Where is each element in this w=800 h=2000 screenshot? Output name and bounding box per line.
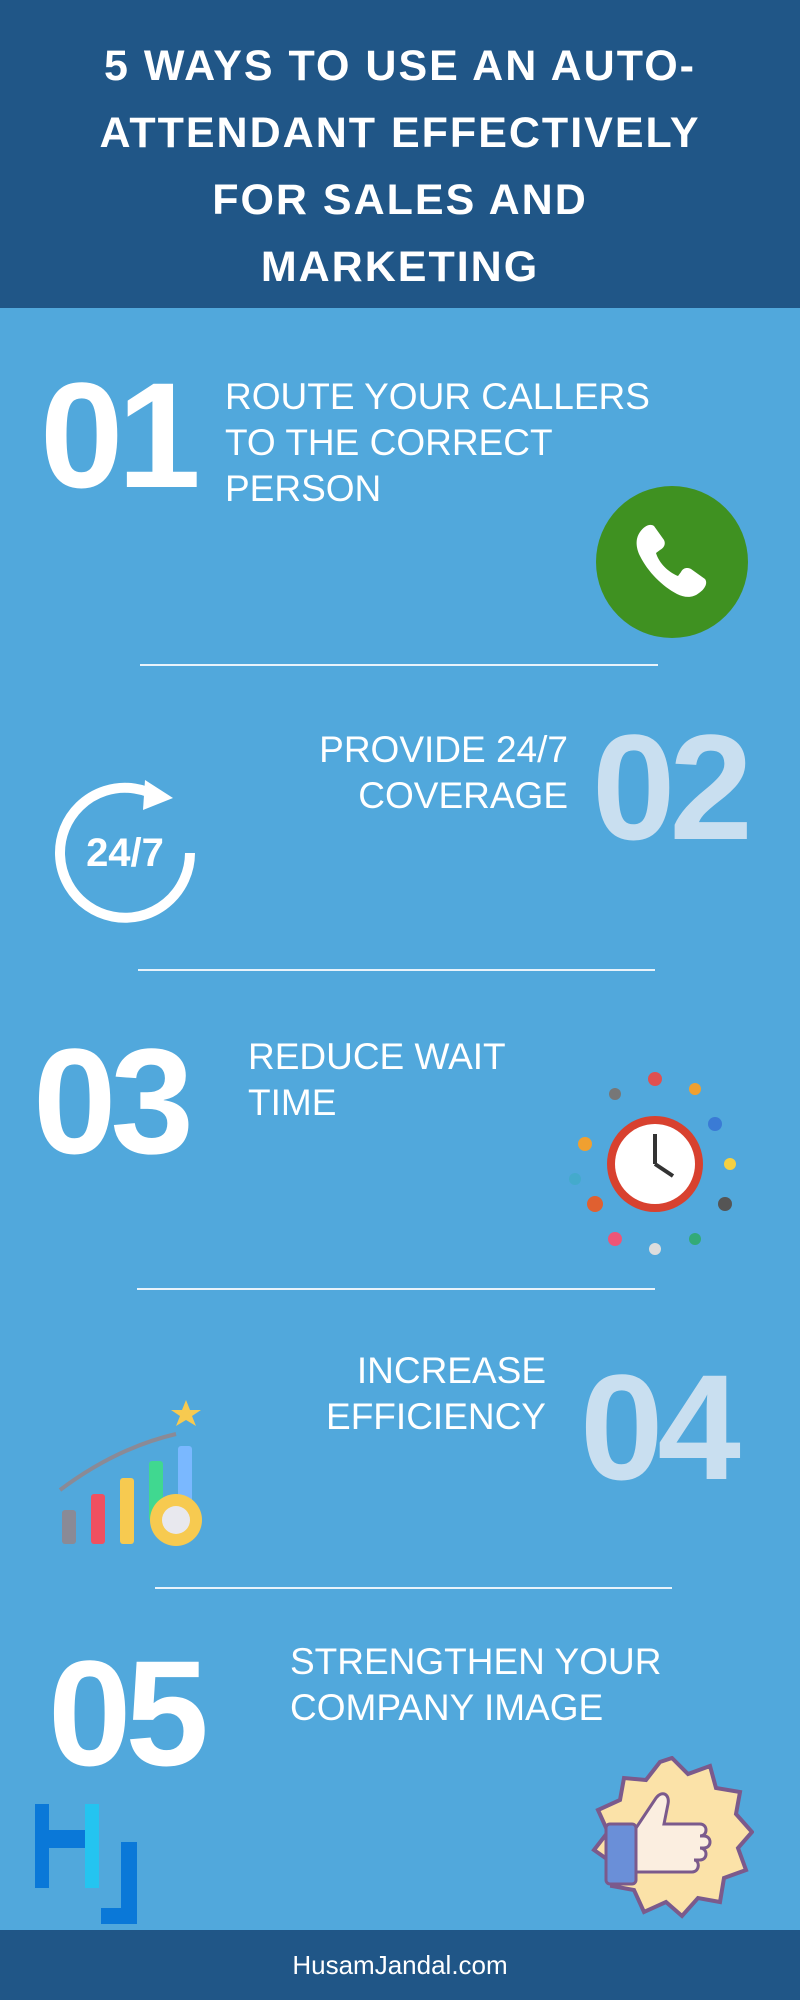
- icon: growth chart: [58, 1400, 202, 1546]
- text 04: EFFICIENCY: [326, 1396, 546, 1437]
- text 04: INCREASE: [357, 1350, 546, 1391]
- text 01: PERSON: [225, 468, 381, 509]
- title: MARKETING: [261, 243, 539, 291]
- number 01: 01: [40, 351, 195, 519]
- icon: 24/7: 24/7: [86, 831, 164, 875]
- title: 5 WAYS TO USE AN AUTO-: [104, 42, 696, 90]
- text 02: COVERAGE: [358, 775, 568, 816]
- text 03: [248, 1036, 506, 1123]
- icon: phone: [596, 486, 748, 638]
- text 01: ROUTE YOUR CALLERS: [225, 376, 650, 417]
- number 02: 02: [592, 703, 747, 871]
- text 01: [225, 376, 650, 509]
- text 02: PROVIDE 24/7: [319, 729, 568, 770]
- text 05: STRENGTHEN YOUR: [290, 1641, 661, 1682]
- icon: clock with office icons: [569, 1072, 736, 1255]
- title: ATTENDANT EFFECTIVELY: [99, 109, 701, 157]
- logo: HJ: [35, 1804, 137, 1924]
- number 05: 05: [48, 1629, 203, 1797]
- footer: [0, 1930, 800, 2000]
- title: FOR SALES AND: [212, 176, 588, 224]
- text 05: [290, 1641, 661, 1728]
- text 03: TIME: [248, 1082, 336, 1123]
- text 04: [326, 1350, 546, 1437]
- text 01: TO THE CORRECT: [225, 422, 553, 463]
- icon: thumbs up badge: [591, 1756, 754, 1919]
- footer text: HusamJandal.com: [292, 1950, 508, 1980]
- title: [99, 42, 701, 291]
- number 03: 03: [33, 1017, 188, 1185]
- number 04: 04: [580, 1343, 735, 1511]
- text 03: REDUCE WAIT: [248, 1036, 506, 1077]
- text 02: [319, 729, 568, 816]
- icon: 24/7: [55, 780, 195, 923]
- text 05: COMPANY IMAGE: [290, 1687, 603, 1728]
- header: [0, 0, 800, 308]
